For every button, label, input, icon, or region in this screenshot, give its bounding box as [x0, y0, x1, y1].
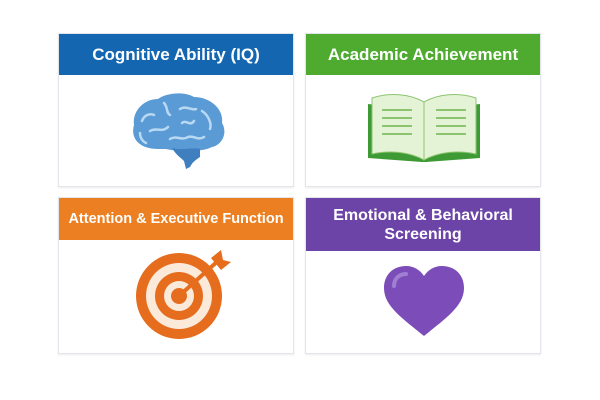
heading: Emotional & Behavioral Screening: Emotional & Behavioral [333, 206, 513, 224]
heading: Academic Achievement: Academic Achievement [328, 45, 518, 64]
icon: heart [384, 266, 464, 336]
heading: Emotional & Behavioral Screening: Screening [384, 226, 462, 242]
icon: brain [133, 93, 224, 169]
panel: emotional & behavioral screening [305, 197, 541, 354]
heading: Cognitive Ability (IQ): Cognitive Ability (IQ) [92, 45, 260, 64]
icon: target with arrow [136, 250, 231, 339]
icon: open book [368, 94, 480, 162]
heading: Attention & Executive Function [59, 198, 293, 240]
heading: Emotional & Behavioral Screening [306, 198, 540, 251]
panel: attention & executive function [58, 197, 294, 354]
heading: Academic Achievement [306, 34, 540, 75]
heading: Attention & Executive Function: Attention & Executive Function [68, 210, 284, 226]
panel: cognitive ability [58, 33, 294, 187]
heading: Cognitive Ability (IQ) [59, 34, 293, 75]
panel: academic achievement [305, 33, 541, 187]
